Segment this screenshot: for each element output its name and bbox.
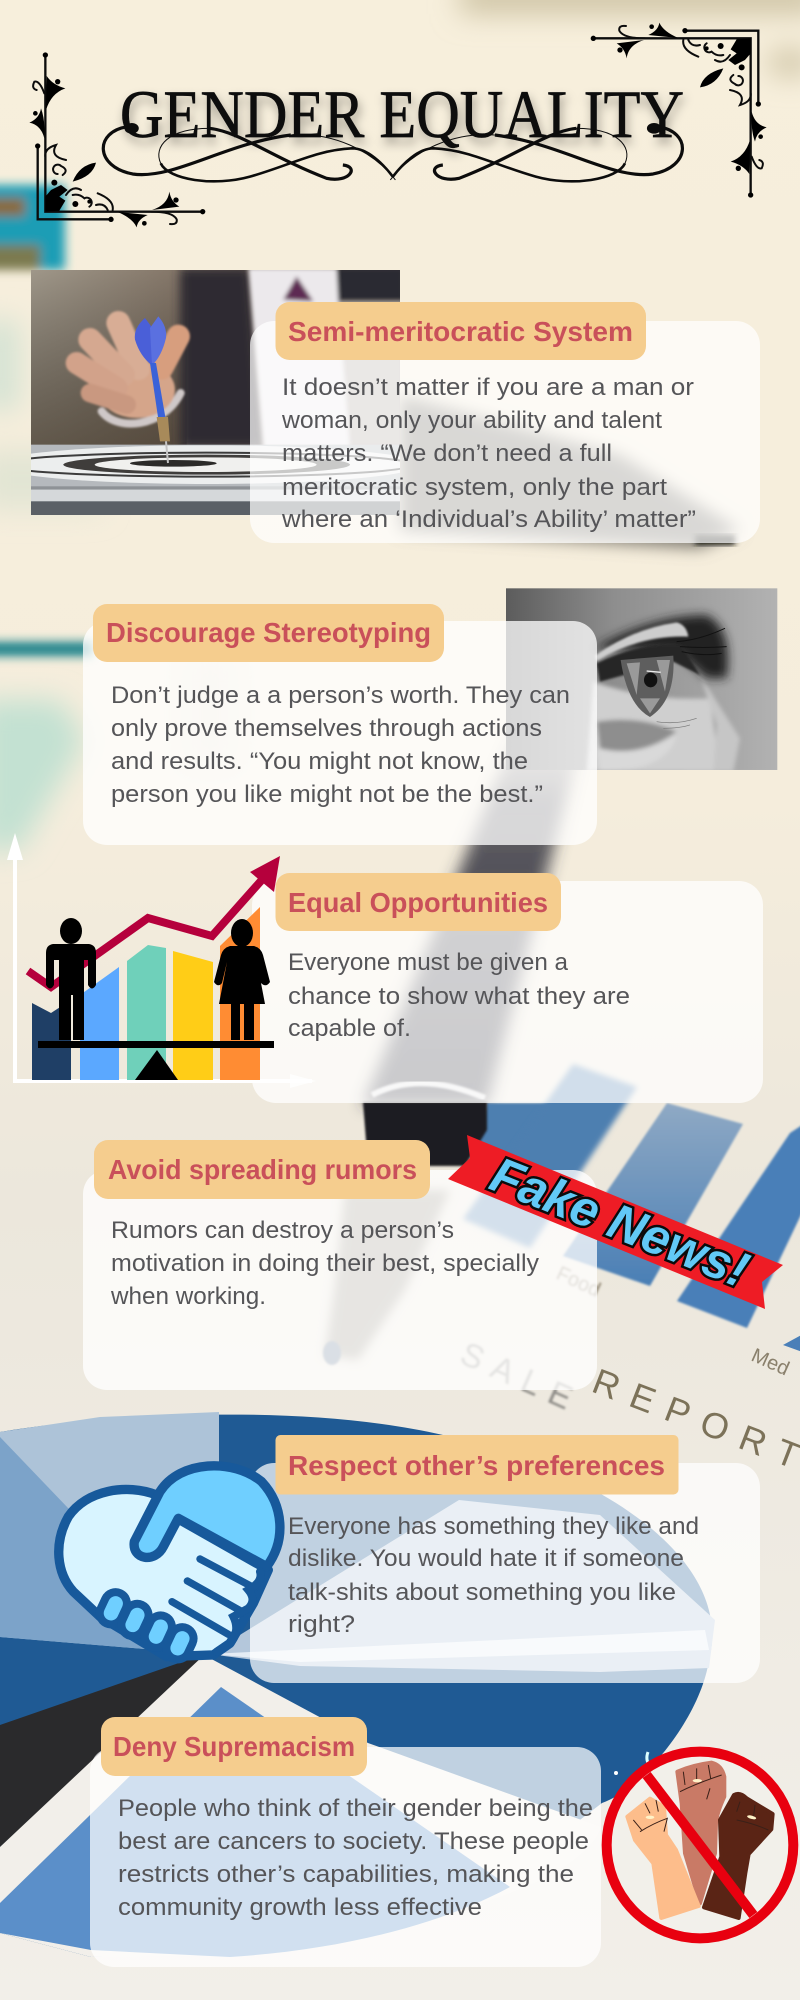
body text <box>111 682 570 808</box>
body text: talk-shits about something you like <box>288 1579 676 1606</box>
body text: where an ‘Individual’s Ability’ matter” <box>281 506 696 533</box>
body text: matters. “We don’t need a full <box>282 440 612 467</box>
heading tag <box>93 604 444 662</box>
pie chart <box>0 1415 712 1957</box>
body text <box>281 374 696 533</box>
background: blurred business photo: REPORT <box>587 1360 800 1477</box>
fingers of the left hand <box>96 1588 197 1663</box>
title <box>103 76 684 181</box>
icon: woman <box>214 919 270 1040</box>
heading tag: Discourage Stereotyping <box>106 617 431 648</box>
chart bars in background <box>463 1064 637 1248</box>
body text: Don’t judge a a person’s worth. They can <box>111 682 570 709</box>
heading tag: respect other's preferences <box>276 1435 678 1494</box>
heading tag: equal opportunities: Equal Opportunities <box>288 887 548 918</box>
dart <box>134 318 152 364</box>
panel: respect other's preferences <box>250 1463 760 1683</box>
body text: motivation in doing their best, specially <box>111 1250 539 1277</box>
body text: meritocratic system, only the part <box>282 474 667 501</box>
corner ornament: top right <box>591 23 767 198</box>
body text: when working. <box>110 1283 266 1310</box>
body text: best are cancers to society. These people <box>118 1828 589 1855</box>
body text <box>118 1795 593 1921</box>
body text: person you like might not be the best.” <box>111 781 543 808</box>
body text: People who think of their gender being the <box>118 1795 593 1822</box>
icon: man <box>46 918 96 1040</box>
body text: restricts other’s capabilities, making the <box>118 1861 574 1888</box>
heading tag: Avoid spreading rumors <box>108 1154 417 1185</box>
background: blurred business photo: Food <box>553 1263 604 1302</box>
printed report text: SALE <box>455 1335 578 1416</box>
body text: dislike. You would hate it if someone <box>288 1545 684 1572</box>
body text: community growth less effective <box>118 1894 482 1921</box>
body text: Everyone has something they like and <box>288 1513 699 1540</box>
title: GENDER EQUALITY <box>120 76 684 152</box>
hand <box>77 323 181 424</box>
heading tag <box>276 302 646 360</box>
panel: discourage stereotyping <box>83 604 597 845</box>
heading tag: Semi-meritocratic System <box>288 316 633 347</box>
heading tag <box>101 1717 367 1776</box>
body text: It doesn’t matter if you are a man or <box>282 374 694 401</box>
heading tag: respect other's preferences: Respect other’s preferences <box>288 1450 665 1481</box>
heading tag: Deny Supremacism <box>113 1731 355 1762</box>
body text <box>110 1217 539 1310</box>
heading tag <box>94 1140 430 1199</box>
body text: right? <box>288 1611 355 1638</box>
panel: semi-meritocratic system <box>250 302 760 543</box>
icon: handshake heart <box>59 1466 280 1663</box>
panel: deny supremacism <box>90 1717 601 1967</box>
target <box>31 444 400 490</box>
icon: no supremacy, raised fists in a prohibition sign <box>607 1752 793 1938</box>
chart: bars, rising arrow and balanced man and woman <box>7 833 316 1088</box>
photo: eye <box>506 588 777 772</box>
body text: capable of. <box>288 1015 411 1042</box>
body text: Rumors can destroy a person’s <box>111 1217 454 1244</box>
ribbon: fake news: Fake News! <box>483 1146 756 1298</box>
panel: equal opportunities <box>252 881 763 1103</box>
pen barrel <box>363 700 592 1105</box>
title flourish <box>103 123 682 181</box>
background: blurred business photo: Med <box>748 1344 792 1380</box>
body text: and results. “You might not know, the <box>111 748 528 775</box>
body text: only prove themselves through actions <box>111 715 542 742</box>
photo: dart hitting target <box>31 270 400 515</box>
body text <box>288 949 630 1042</box>
iris <box>621 656 674 717</box>
corner ornament: bottom left <box>29 52 205 227</box>
body text: Everyone must be given a <box>288 949 569 976</box>
heading tag: equal opportunities <box>276 873 561 931</box>
panel: avoid spreading rumors <box>83 1140 597 1390</box>
body text: chance to show what they are <box>288 983 630 1010</box>
body text <box>288 1513 699 1638</box>
body text: woman, only your ability and talent <box>281 407 662 434</box>
